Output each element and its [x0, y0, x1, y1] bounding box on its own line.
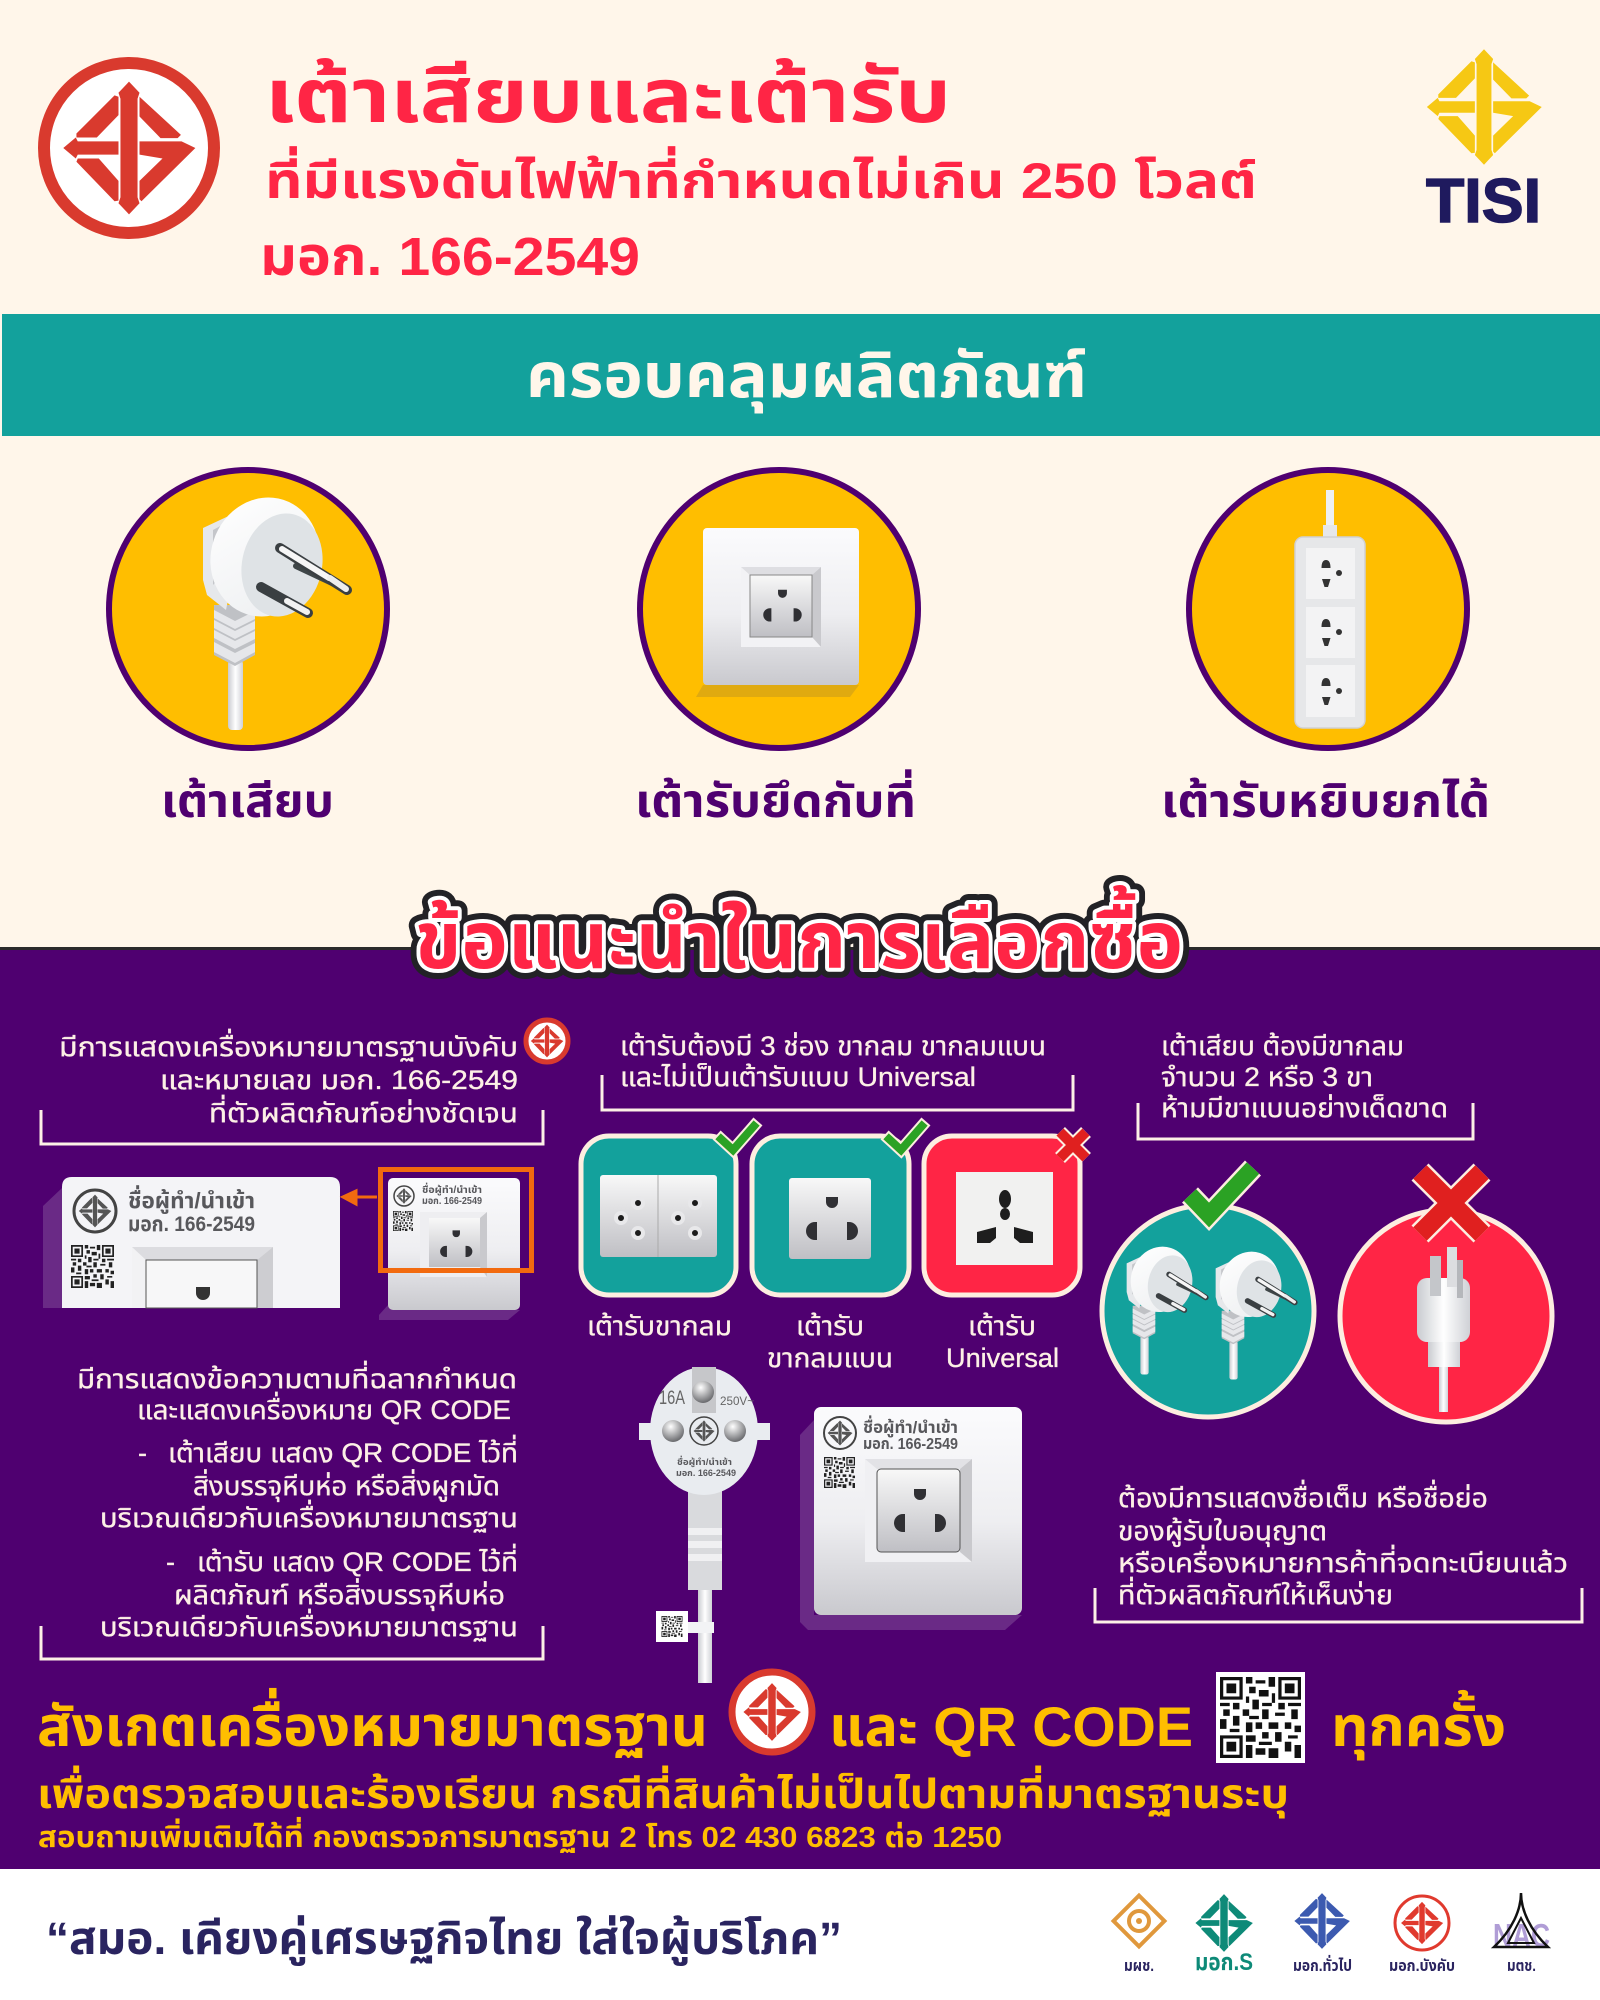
text: license name requirement: หรือเครื่องหมายการค้าที่จดทะเบียนแล้ว: [1118, 1544, 1568, 1578]
text: socket must have three holes: เต้ารับต้องมี 3 ช่อง ขากลม ขากลมแบน: [620, 1031, 1046, 1061]
text: license name requirement: ต้องมีการแสดงชื่อเต็ม หรือชื่อย่อ: [1118, 1479, 1488, 1513]
text: plug pin rule: ห้ามมีขาแบนอย่างเด็ดขาด: [1161, 1093, 1448, 1123]
banner: product coverage: ครอบคลุมผลิตภัณฑ์: [526, 342, 1087, 413]
text: QR code label rules: บริเวณเดียวกับเครื่องหมายมาตรฐาน: [100, 1608, 518, 1642]
text: standard mark requirement: [41, 1028, 543, 1144]
circle: rejected flat pin plug: [1340, 1172, 1552, 1422]
TISI logo: [1426, 49, 1542, 236]
circle: correct round pin plugs: [1102, 1168, 1314, 1417]
call to action text: และ QR CODE: [829, 1695, 1193, 1758]
text: QR code label rules: และแสดงเครื่องหมาย QR CODE: [137, 1391, 511, 1425]
footer logo: NAC tower: [1493, 1893, 1550, 1975]
header: red standard mark: [44, 63, 214, 233]
text: license name requirement: ของผู้รับใบอนุญาต: [1118, 1516, 1327, 1547]
footer logo: TIS general: มอก.ทั่วไป: [1293, 1955, 1352, 1975]
text: QR code label rules: -: [138, 1438, 147, 1468]
socket with marking: มอก. 166-2549: [863, 1436, 958, 1453]
title block: ที่มีแรงดันไฟฟ้าที่กำหนดไม่เกิน 250 โวลต์: [265, 146, 1257, 209]
text: QR code label rules: มีการแสดงข้อความตามที่ฉลากกำหนด: [77, 1360, 517, 1394]
footer logo: TIS mandatory: มอก.บังคับ: [1389, 1958, 1455, 1975]
socket with marking: ชื่อผู้ทำ/นำเข้า: [863, 1415, 958, 1438]
arrow: zoom from socket to label: [343, 1191, 377, 1204]
footer logo: TIS S: [1195, 1894, 1253, 1976]
footer logo: NAC tower: NAC: [1493, 1917, 1550, 1954]
plug with marking: 250V~: [720, 1394, 754, 1408]
title block: [260, 54, 1257, 287]
card: universal socket: [924, 1132, 1086, 1373]
text: QR code label rules: [41, 1360, 543, 1659]
text: socket must have three holes: [602, 1031, 1073, 1110]
heading: buying advice: ข้อแนะนำในการเลือกซื้อ: [415, 885, 1183, 985]
plug with marking: ชื่อผู้ทำ/นำเข้า: [677, 1455, 732, 1467]
text: QR code label rules: -: [166, 1547, 175, 1577]
text: QR code label rules: บริเวณเดียวกับเครื่องหมายมาตรฐาน: [100, 1499, 518, 1533]
call to action text: [37, 1687, 1506, 1854]
text: QR code label rules: เต้ารับ แสดง QR CODE ไว้ที่: [197, 1543, 518, 1577]
call to action text: สอบถามเพิ่มเติมได้ที่ กองตรวจการมาตรฐาน 2 โทร 02 430 6823 ต่อ 1250: [38, 1816, 1002, 1854]
text: plug pin rule: [1138, 1031, 1473, 1139]
product: power strip: เต้ารับหยิบยกได้: [1161, 775, 1490, 827]
call to action QR code: [1216, 1672, 1305, 1763]
footer logo: community product: มผช.: [1124, 1958, 1154, 1975]
call to action text: เพื่อตรวจสอบและร้องเรียน กรณีที่สินค้าไม่เป็นไปตามที่มาตรฐานระบุ: [37, 1765, 1289, 1819]
socket with marking: [800, 1407, 1022, 1630]
product: wall socket: [635, 470, 918, 827]
banner: product coverage: [2, 314, 1600, 436]
card: universal socket: เต้ารับ: [968, 1311, 1036, 1341]
socket with highlighted label: ชื่อผู้ทำ/นำเข้า: [422, 1182, 482, 1196]
TISI logo: TISI: [1426, 167, 1541, 236]
product: plug: เต้าเสียบ: [161, 775, 334, 827]
text: standard mark requirement: และหมายเลข มอก. 166-2549: [160, 1065, 518, 1095]
footer logo: TIS general: [1293, 1893, 1352, 1975]
enlarged label card: ชื่อผู้ทำ/นำเข้า: [128, 1185, 255, 1214]
heading: buying advice: ข้อแนะนำในการเลือกซื้อ: [415, 885, 1183, 985]
text: socket must have three holes: และไม่เป็นเต้ารับแบบ Universal: [620, 1062, 976, 1092]
card: round pin socket: เต้ารับขากลม: [587, 1311, 732, 1341]
text: standard mark requirement: ที่ตัวผลิตภัณฑ์อย่างชัดเจน: [209, 1094, 518, 1128]
socket with highlighted label: มอก. 166-2549: [422, 1196, 482, 1207]
text: plug pin rule: เต้าเสียบ ต้องมีขากลม: [1161, 1031, 1404, 1061]
socket with highlighted label: [379, 1170, 532, 1320]
call to action text: ทุกครั้ง: [1331, 1689, 1506, 1761]
call to action text: สังเกตเครื่องหมายมาตรฐาน: [37, 1687, 708, 1758]
footer logo: community product: [1114, 1896, 1164, 1975]
text: standard mark requirement: มีการแสดงเครื่องหมายมาตรฐานบังคับ: [59, 1028, 518, 1062]
product: wall socket: เต้ารับยึดกับที่: [635, 769, 916, 827]
plug with marking: [639, 1367, 770, 1683]
text: QR code label rules: สิ่งบรรจุหีบห่อ หรือสิ่งผูกมัด: [193, 1469, 500, 1502]
text: license name requirement: [1095, 1479, 1582, 1622]
plug with marking: มอก. 166-2549: [676, 1468, 736, 1478]
product: power strip: [1161, 470, 1490, 827]
plug with marking: 16A: [659, 1388, 685, 1409]
text: plug pin rule: จำนวน 2 หรือ 3 ขา: [1161, 1062, 1373, 1092]
footer logo: TIS S: มอก.S: [1195, 1949, 1253, 1976]
title block: เต้าเสียบและเต้ารับ: [265, 54, 951, 139]
card: flat and round pin socket: เต้ารับ: [796, 1311, 864, 1341]
card: flat and round pin socket: ขากลมแบน: [767, 1343, 893, 1373]
footer slogan: “สมอ. เคียงคู่เศรษฐกิจไทย ใส่ใจผู้บริโภค”: [46, 1913, 842, 1966]
card: flat and round pin socket: [752, 1126, 922, 1373]
text: license name requirement: ที่ตัวผลิตภัณฑ์ให้เห็นง่าย: [1118, 1576, 1393, 1610]
card: round pin socket: [581, 1126, 754, 1341]
heading: buying advice: ข้อแนะนำในการเลือกซื้อ: [415, 885, 1183, 985]
small mandatory mark icon: [526, 1020, 568, 1062]
footer logo: TIS mandatory: [1389, 1896, 1455, 1975]
text: QR code label rules: ผลิตภัณฑ์ หรือสิ่งบรรจุหีบห่อ: [174, 1578, 505, 1611]
enlarged label card: มอก. 166-2549: [128, 1213, 255, 1236]
enlarged label card: [43, 1177, 340, 1308]
title block: มอก. 166-2549: [260, 227, 640, 287]
footer background: [0, 1869, 1600, 2000]
footer logo: NAC tower: มตช.: [1507, 1958, 1536, 1975]
purple advice section: [0, 947, 1600, 1869]
product: plug: [109, 470, 387, 827]
card: universal socket: Universal: [946, 1343, 1059, 1373]
call to action mandatory mark: [732, 1672, 812, 1752]
text: QR code label rules: เต้าเสียบ แสดง QR CODE ไว้ที่: [168, 1434, 518, 1468]
